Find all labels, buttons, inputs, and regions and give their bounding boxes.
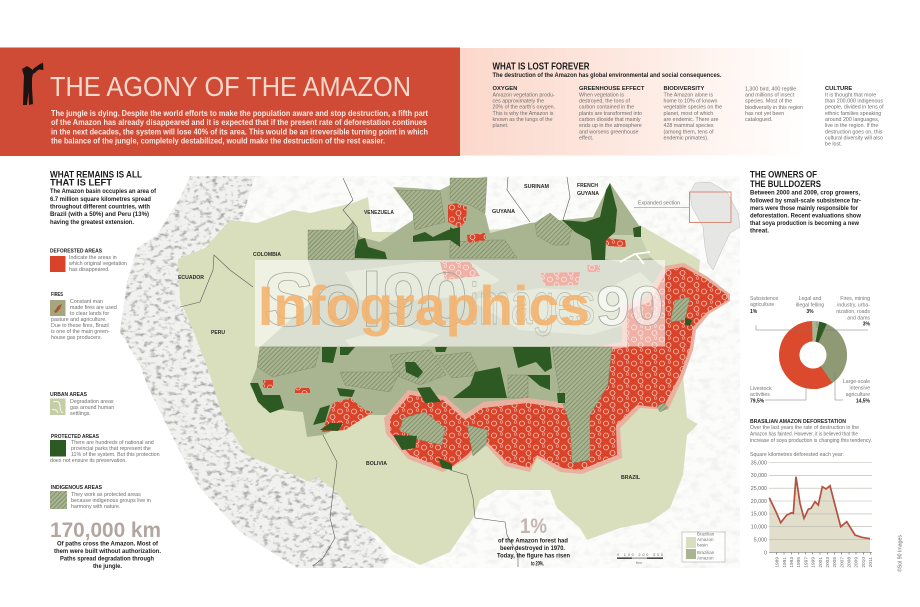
panel: what remains: THAT IS LEFT — [50, 177, 113, 187]
panel: Brasilian Amazon deforestation: Over the last years the rate of destruction in the — [750, 425, 859, 431]
callout: 170,000 km: Paths spread degradation through — [60, 556, 154, 562]
column: biodiversity continued: 1,300 bird, 400 reptile — [745, 86, 796, 92]
country labels: FRENCH — [577, 183, 598, 189]
callout: 170,000 km: Of paths cross the Amazon. Most of — [57, 540, 159, 548]
column: culture: live in the region. If the — [825, 123, 878, 129]
x axis labels: 1997 — [804, 557, 810, 568]
locator map: South America — [634, 182, 740, 270]
y axis labels: 30,000 — [751, 473, 767, 479]
terrain relief — [120, 176, 740, 568]
label: livestock: Livestock — [750, 386, 772, 392]
panel: owners of the bulldozers: followed by small-scale subsistence far- — [750, 197, 861, 204]
column: oxygen: Amazon vegetation produ- — [492, 92, 555, 98]
panel: owners of the bulldozers: Between 2000 and 2009, crop growers, — [750, 190, 860, 196]
column: biodiversity continued: catalogued. — [745, 117, 772, 123]
x axis labels: 2005 — [832, 557, 838, 568]
column: culture: than 200,000 indigenous — [825, 99, 883, 105]
legend: indigenous areas — [50, 485, 151, 510]
panel: owners of the bulldozers — [750, 170, 862, 234]
label: livestock: 79,5% — [750, 398, 765, 404]
locator map: South America: Expanded section — [638, 200, 680, 206]
panel: Brasilian Amazon deforestation: BRASILIAN AMAZON DEFORESTATION — [750, 419, 846, 425]
column: greenhouse effect: carbon contained in the — [579, 105, 634, 111]
panel: what remains: throughout different countries, with — [50, 204, 150, 210]
legend: fires — [50, 292, 117, 341]
header panel: what is lost forever — [460, 48, 920, 156]
label: subsistence agriculture: Subsistence — [750, 296, 778, 302]
label: legal and illegal felling: 3% — [806, 309, 814, 315]
legend: fires: is one of the main green- — [51, 329, 110, 335]
label: fires, mining: nization, roads — [836, 309, 870, 315]
label: large-scale agriculture: agriculture — [846, 392, 870, 398]
map legend: Brazilian — [697, 532, 715, 536]
country labels: BOLIVIA — [366, 461, 387, 467]
y axis labels: 20,000 — [751, 499, 767, 505]
main deforestation arc — [390, 267, 728, 470]
map legend — [682, 532, 725, 562]
column: biodiversity: (among them, tens of — [664, 129, 714, 135]
callout: 1% — [497, 515, 570, 568]
protected areas — [250, 183, 692, 470]
column: biodiversity — [664, 86, 722, 141]
leader lines — [756, 321, 868, 400]
label: legal and illegal felling: Legal and — [799, 296, 822, 302]
intro text: of the Amazon has already disappeared and it is expected that if the present rate of deforestation continues — [51, 117, 427, 127]
map legend: basin — [697, 542, 708, 548]
scale bar: Km — [636, 561, 642, 565]
legend: deforested areas: has disappeared. — [69, 267, 110, 273]
intro text: The jungle is dying. Despite the world efforts to make the population aware and stop destruction, a fifth part — [51, 108, 428, 118]
donut chart — [750, 296, 871, 404]
column: biodiversity: planet, most of which — [664, 111, 713, 117]
label: subsistence agriculture: 1% — [750, 309, 758, 315]
column: culture: destruction goes on, this — [825, 129, 883, 135]
callout: 1%: 1% — [520, 515, 547, 538]
legend: indigenous areas: because indigenous groups live in — [71, 498, 151, 504]
callout: 1%: Today, the figure has risen — [497, 552, 570, 560]
legend: protected areas: 11% of the system. But this protection — [71, 452, 160, 458]
label: livestock — [750, 386, 772, 404]
map legend: Amazon — [697, 556, 714, 560]
line chart — [751, 460, 874, 568]
x axis labels: 2011 — [868, 557, 874, 567]
panel: Brasilian Amazon deforestation: Amazon has fainted. However, it is believed that the — [750, 432, 858, 438]
panel: what remains: having the greatest extension. — [50, 219, 134, 226]
y axis labels: 15,000 — [751, 512, 767, 518]
watermark band — [255, 258, 665, 346]
scale bar: 0 100 200 300 — [617, 553, 663, 557]
map of the Amazon — [120, 176, 740, 568]
label: large-scale agriculture: intensive — [850, 386, 870, 392]
column: greenhouse effect: destroyed, the tons of — [579, 99, 630, 105]
callout: 1%: to 20%. — [531, 560, 544, 568]
y axis labels — [751, 460, 767, 556]
Amazon basin area — [178, 197, 700, 565]
column: greenhouse effect: effect. — [579, 135, 593, 141]
intro text: in the next decades, the system will lose 40% of its area. This would be an irreversible turning point in which — [51, 126, 428, 136]
panel: owners of the bulldozers: THE BULLDOZERS — [750, 179, 821, 189]
country labels: PERU — [211, 330, 225, 336]
column: oxygen: 20% of the earth's oxygen. — [492, 105, 555, 111]
panel: what remains: The Amazon basin occupies an area of — [50, 188, 157, 195]
x axis labels: 2008 — [846, 557, 852, 568]
panel: Brasilian Amazon deforestation: increase of soya production is changing this tendency. — [750, 438, 872, 444]
watermark band: images — [470, 272, 595, 337]
legend: protected areas: PROTECTED AREAS — [51, 434, 99, 440]
watermark band: Infographics — [258, 274, 590, 337]
header panel: title — [0, 48, 460, 156]
legend: protected areas: provincial parks that represent the — [71, 446, 151, 452]
legend: urban areas — [50, 392, 114, 417]
column: oxygen: This is why the Amazon is — [492, 111, 554, 117]
x axis labels: 1995 — [796, 557, 802, 568]
Amazon river mouth — [620, 252, 650, 264]
column: oxygen: planet. — [492, 123, 508, 129]
intro text — [51, 108, 428, 146]
y axis labels: 0 — [764, 550, 767, 556]
column: culture: be lost. — [825, 142, 842, 148]
legend: deforested areas: DEFORESTED AREAS — [50, 249, 102, 255]
column: biodiversity: vegetable species on the — [664, 105, 722, 111]
callout: 170,000 km: 170,000 km — [50, 519, 161, 542]
heading: WHAT IS LOST FOREVER — [492, 62, 590, 72]
legend: urban areas: URBAN AREAS — [50, 392, 87, 398]
x axis labels: 1993 — [789, 557, 795, 568]
x axis labels: 2003 — [825, 557, 831, 568]
column: greenhouse effect: When vegetation is — [579, 92, 624, 98]
y axis labels: 35,000 — [751, 460, 767, 466]
y axis labels: 5,000 — [754, 537, 767, 543]
legend: fires: to clear lands for — [70, 311, 109, 317]
subheading: The destruction of the Amazon has global environmental and social consequences. — [492, 72, 722, 79]
scale bar — [617, 553, 663, 565]
column: culture — [825, 86, 884, 148]
legend: protected areas: There are hundreds of national and — [71, 440, 154, 446]
legend: protected areas — [50, 434, 160, 464]
legend: fires: Due to these fires, Brazil — [51, 323, 109, 329]
column: biodiversity: 428 mammal species — [664, 123, 714, 129]
country labels: GUYANA — [577, 191, 599, 197]
column: biodiversity: The Amazon alone is — [664, 92, 713, 98]
legend: deforested areas: Indicate the areas in — [69, 255, 117, 261]
panel: what remains: 6.7 million square kilometres spread — [50, 196, 151, 203]
country labels: ECUADOR — [178, 275, 204, 281]
column: greenhouse effect: carbon dioxide that mainly — [579, 117, 641, 123]
label: fires, mining: Fires, mining — [840, 296, 870, 302]
country labels: SURINAM — [524, 184, 550, 190]
label: large-scale agriculture: 14,5% — [856, 398, 871, 404]
y axis labels: 25,000 — [751, 486, 767, 492]
panel: owners of the bulldozers: deforestation. Recent evaluations show — [750, 212, 862, 220]
column: biodiversity continued: biodiversity in this region — [745, 105, 803, 111]
legend: protected areas: does not ensure its preservation. — [50, 458, 127, 464]
column: biodiversity continued: has not yet been — [745, 111, 784, 117]
panel: what remains: WHAT REMAINS IS ALL — [50, 170, 142, 180]
column: oxygen: ces approximately the — [492, 99, 544, 105]
country labels: BRAZIL — [621, 475, 641, 481]
column: biodiversity: are endemic. There are — [664, 117, 719, 123]
callout: 170,000 km: them were built without authorization. — [54, 548, 161, 555]
legend: urban areas: Degradation areas — [70, 399, 114, 405]
column: biodiversity: BIODIVERSITY — [664, 86, 705, 92]
column: biodiversity continued: species. Most of the — [745, 99, 792, 105]
column: culture: cultural diversity will also — [825, 135, 883, 141]
x axis labels: 2001 — [818, 557, 824, 568]
label: fires, mining: 3% — [863, 322, 871, 328]
callout: 1%: of the Amazon forest had — [498, 538, 568, 544]
watermark band: 90 — [596, 274, 664, 337]
label: legal and illegal felling: illegal felling — [796, 302, 824, 308]
column: oxygen: known as the lungs of the — [492, 117, 553, 123]
column: biodiversity: endemic primates). — [664, 135, 709, 141]
label: fires, mining: and dams — [847, 316, 870, 322]
x axis labels: 2009 — [854, 557, 860, 568]
label: subsistence agriculture — [750, 296, 778, 315]
legend: fires: FIRES — [51, 292, 63, 298]
panel: owners of the bulldozers: THE OWNERS OF — [750, 170, 817, 180]
column: culture: ethnic families speaking — [825, 111, 881, 117]
x axis labels: 1999 — [810, 557, 816, 568]
panel: owners of the bulldozers: threat. — [750, 227, 769, 234]
column: greenhouse effect: ends up in the atmosphere — [579, 123, 642, 129]
country labels: VENEZUELA — [364, 210, 394, 216]
pink degraded halo — [384, 263, 730, 474]
legend: indigenous areas: They work as protected areas — [71, 492, 141, 498]
label: large-scale agriculture — [843, 379, 871, 404]
icon: man with megaphone — [22, 62, 44, 105]
panel: Brasilian Amazon deforestation: Square kilometres deforested each year: — [750, 452, 844, 458]
map legend: Amazon — [697, 537, 714, 542]
label: fires, mining: industry, urba- — [837, 302, 870, 308]
panel: what remains — [50, 170, 157, 226]
legend: fires: Constant man — [70, 299, 103, 305]
column: culture: CULTURE — [825, 86, 852, 92]
callout: 170,000 km: the jungle. — [93, 563, 122, 570]
credit: ©Sol 90 Images — [896, 535, 904, 572]
panel: owners of the bulldozers: that soya production is becoming a new — [750, 220, 860, 227]
legend: deforested areas: which original vegetation — [69, 261, 127, 267]
callout: 1%: been destroyed in 1970. — [500, 545, 565, 552]
callout: 170,000 km — [50, 519, 161, 570]
country borders — [180, 177, 570, 567]
panel: Brasilian Amazon deforestation — [750, 419, 874, 568]
legend: deforested areas — [50, 249, 127, 273]
column: culture: people, divided in tens of — [825, 105, 884, 111]
column: biodiversity: home to 10% of known — [664, 99, 717, 105]
legend: fires: pasture and agriculture. — [51, 317, 107, 323]
x axis labels — [774, 557, 874, 568]
column: biodiversity continued: and millions of insect — [745, 92, 795, 98]
column: oxygen: OXYGEN — [492, 86, 517, 92]
label: large-scale agriculture: Large-scale — [843, 379, 870, 385]
watermark band: Sol90 — [263, 258, 468, 343]
x axis labels: 2007 — [840, 557, 846, 568]
Brazilian Amazon area — [250, 177, 727, 468]
column: oxygen — [492, 86, 555, 129]
column: greenhouse effect: plants are transformed into — [579, 111, 642, 117]
x axis labels: 1991 — [782, 557, 788, 568]
legend: indigenous areas: harmony with nature. — [71, 504, 120, 510]
legend: urban areas: gas around human — [70, 405, 114, 411]
x axis labels: 1989 — [774, 557, 780, 568]
title: THE AGONY OF THE AMAZON — [50, 71, 411, 102]
y axis labels: 10,000 — [751, 525, 767, 531]
country labels: COLOMBIA — [253, 252, 281, 258]
country labels — [178, 183, 641, 481]
label: fires, mining — [836, 296, 871, 328]
legend: indigenous areas: INDIGENOUS AREAS — [51, 485, 102, 491]
column: greenhouse effect — [579, 86, 645, 141]
panel: what remains: Brazil (with a 50%) and Peru (13%) — [50, 211, 149, 218]
lighter forest zones — [345, 235, 660, 346]
column: greenhouse effect: GREENHOUSE EFFECT — [579, 86, 645, 92]
legend: fires: made fires are used — [70, 305, 117, 311]
label: livestock: activities — [750, 392, 770, 398]
column: culture: It is thought that more — [825, 92, 876, 98]
x axis labels: 2010 — [861, 557, 867, 568]
column: culture: around 200 languages, — [825, 117, 879, 123]
legend: fires: house gas producers. — [51, 335, 102, 341]
legend: urban areas: settlings. — [70, 411, 91, 417]
deforested areas — [263, 203, 730, 474]
panel: owners of the bulldozers: mers were those mainly responsible for — [750, 205, 858, 212]
column: greenhouse effect: and worsens greenhouse — [579, 129, 639, 135]
country labels: GUYANA — [492, 209, 515, 215]
indigenous areas — [257, 178, 572, 398]
label: legal and illegal felling — [796, 296, 824, 315]
map legend: Brazilian — [697, 550, 715, 555]
hatched areas within deforestation arc — [400, 297, 690, 463]
label: subsistence agriculture: agriculture — [750, 302, 774, 308]
intro text: the balance of the jungle, completely destabilized, would make the destruction of the rest easier. — [51, 136, 385, 146]
